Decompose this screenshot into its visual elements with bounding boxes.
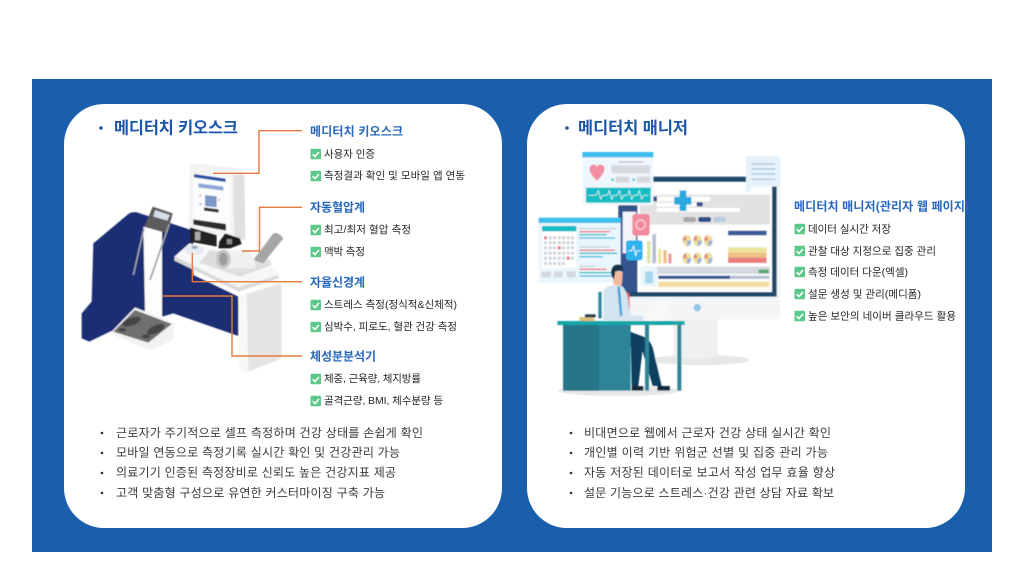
manager web page feature list: 관찰 대상 지정으로 집중 관리 xyxy=(808,246,936,258)
plus icon xyxy=(674,190,691,211)
feature list: body composition xyxy=(310,348,443,407)
panel: manager xyxy=(527,104,969,528)
manager web page feature list: 높은 보안의 네이버 클라우드 활용 xyxy=(808,310,956,322)
monitor frame xyxy=(618,177,777,297)
feature list: body composition: 체중, 근육량, 체지방률 xyxy=(324,373,421,385)
benefits: kiosk: 의료기기 인증된 측정장비로 신뢰도 높은 건강지표 제공 xyxy=(116,466,396,480)
feature list: blood pressure xyxy=(310,199,411,258)
feature list: body composition: 골격근량, BMI, 체수분량 등 xyxy=(324,394,443,407)
kiosk heading: 메디터치 키오스크 xyxy=(114,120,238,138)
desk xyxy=(557,300,685,391)
feature list: blood pressure: 자동혈압계 xyxy=(310,199,365,214)
benefits: manager: 설문 기능으로 스트레스·건강 관련 상담 자료 확보 xyxy=(584,486,834,500)
benefits: kiosk: 근로자가 주기적으로 셀프 측정하며 건강 상태를 손쉽게 확인 xyxy=(116,426,423,440)
table top xyxy=(174,243,278,287)
panel: kiosk xyxy=(64,104,502,528)
benefits: kiosk: 고객 맞춤형 구성으로 유연한 커스터마이징 구축 가능 xyxy=(116,486,385,500)
heart window xyxy=(582,152,653,205)
worker xyxy=(598,264,670,391)
speech bubble xyxy=(746,156,781,194)
illustration: dashboard and worker xyxy=(539,152,781,396)
manager web page feature list xyxy=(794,198,969,322)
benefits: manager: 개인별 이력 기반 위험군 선별 및 집중 관리 가능 xyxy=(584,446,828,460)
floating cards xyxy=(632,214,650,236)
benefits: manager: 자동 저장된 데이터로 보고서 작성 업무 효율 향상 xyxy=(584,466,835,480)
feature list: blood pressure: 맥박 측정 xyxy=(324,246,365,258)
form area xyxy=(640,195,770,225)
feature list: autonomic nerve: 자율신경계 xyxy=(310,275,365,289)
lower table xyxy=(642,267,770,287)
bar chart xyxy=(647,234,672,263)
feature list: kiosk: 사용자 인증 xyxy=(324,148,375,160)
feature list: autonomic nerve: 스트레스 측정(정식적&신체적) xyxy=(324,299,457,311)
monitor shadow and stand xyxy=(651,355,749,365)
feature list: kiosk xyxy=(310,123,465,182)
manager web page feature list: 데이터 실시간 저장 xyxy=(808,224,891,236)
benefits: manager xyxy=(570,426,835,500)
feature list: body composition: 체성분분석기 xyxy=(310,348,376,363)
illustration: kiosk device xyxy=(82,163,283,372)
data table xyxy=(728,231,767,263)
feature list: kiosk: 측정결과 확인 및 모바일 앱 연동 xyxy=(324,169,465,182)
feature list: kiosk: 메디터치 키오스크 xyxy=(310,123,403,138)
body composition analyser column xyxy=(143,227,162,318)
floor shadow xyxy=(558,385,679,396)
kiosk body xyxy=(188,163,245,242)
manager web page feature list: 메디터치 매니저(관리자 웹 페이지) xyxy=(794,198,969,213)
feature list: autonomic nerve xyxy=(310,275,457,333)
pie charts xyxy=(683,235,713,264)
blood pressure monitor xyxy=(199,250,272,277)
manager web page feature list: 설문 생성 및 관리(메디폼) xyxy=(808,288,921,300)
kiosk screen xyxy=(193,173,231,233)
navy partition xyxy=(82,212,238,342)
palm sensor xyxy=(184,245,204,255)
feature list: autonomic nerve: 심박수, 피로도, 혈관 건강 측정 xyxy=(324,320,457,333)
benefits: kiosk: 모바일 연동으로 측정기록 실시간 확인 및 건강관리 가능 xyxy=(116,446,400,460)
manager heading: 메디터치 매니저 xyxy=(578,120,688,138)
connector lines xyxy=(163,131,302,356)
calendar window xyxy=(539,218,621,283)
benefits: kiosk xyxy=(101,426,423,500)
manager web page feature list: 측정 데이터 다운(엑셀) xyxy=(808,266,908,278)
cabinet xyxy=(238,284,282,372)
benefits: manager: 비대면으로 웹에서 근로자 건강 상태 실시간 확인 xyxy=(584,426,831,440)
feature list: blood pressure: 최고/최저 혈압 측정 xyxy=(324,223,411,236)
blue background band xyxy=(32,79,992,552)
scale base xyxy=(110,307,175,351)
